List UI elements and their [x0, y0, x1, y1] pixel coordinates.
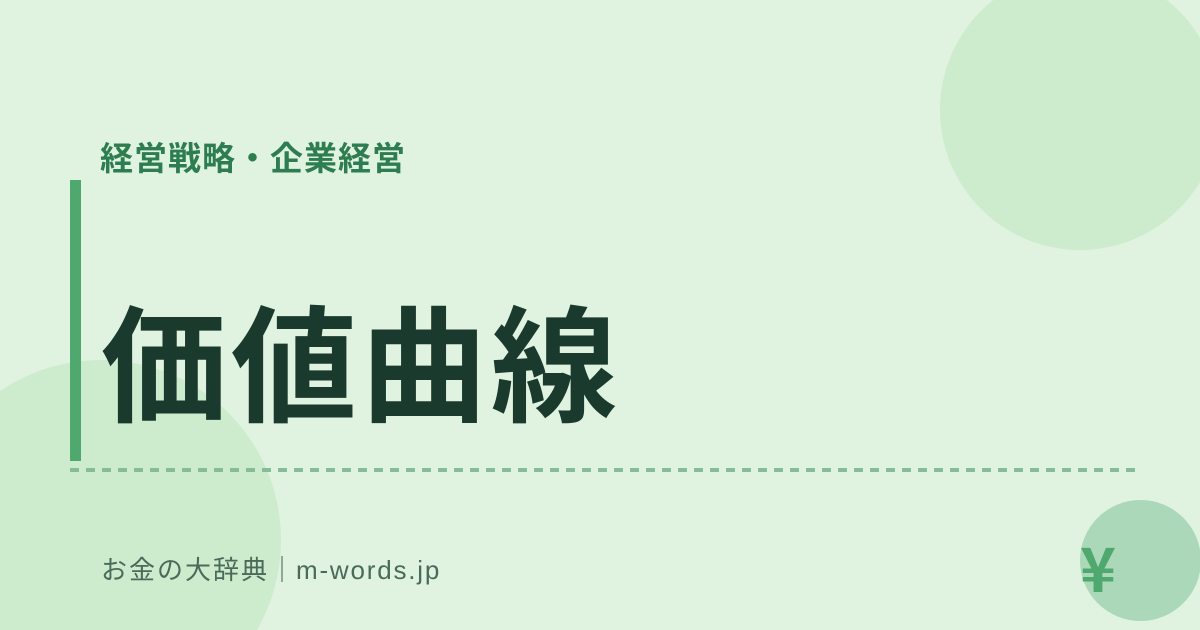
decorative circle: bottom left [0, 360, 281, 630]
accent bar [70, 180, 81, 461]
footer site name: お金の大辞典｜m-words.jp [101, 555, 441, 585]
title: 価値曲線 [101, 298, 621, 439]
category label: 経営戦略・企業経営 [100, 140, 406, 177]
dashed divider [70, 468, 1135, 472]
decorative circle: top right [940, 0, 1200, 250]
icon: yen sign: ¥ [1080, 521, 1116, 610]
decorative circle: bottom right [1080, 500, 1200, 621]
